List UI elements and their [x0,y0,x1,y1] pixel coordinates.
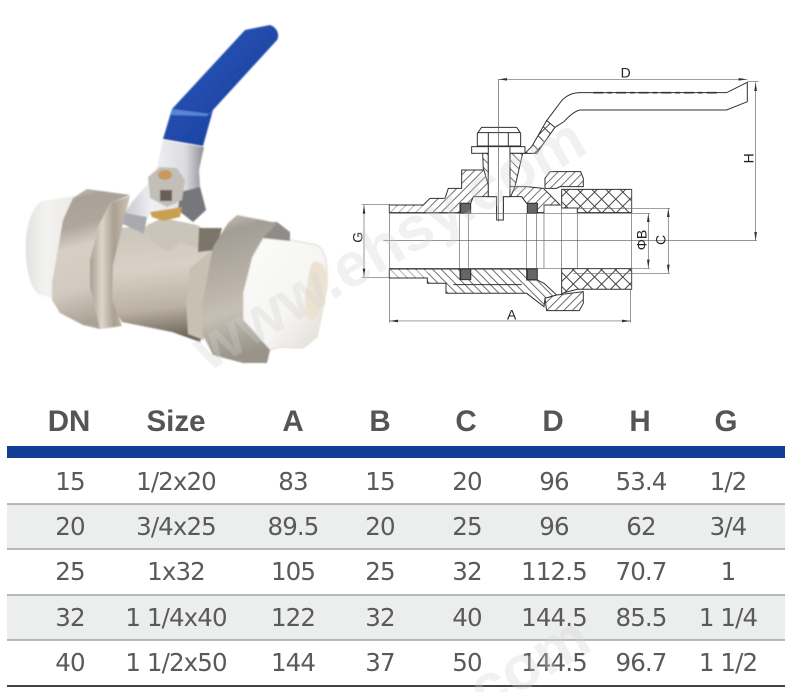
header row: B [369,405,391,438]
row DN20: 25 [452,512,482,541]
row DN40: 144 [271,648,315,677]
row DN40: 1 1/2 [699,648,757,677]
nut centre [158,170,172,180]
dimension labels: D [621,65,631,81]
row DN25: 1x32 [147,557,205,586]
right white pipe [243,238,327,350]
seal rings [461,203,537,280]
photo: ball valve with blue lever handle [26,25,327,363]
hex nut [477,127,521,146]
row DN15: 96 [539,467,569,496]
bottom body section [389,269,557,307]
valve body [108,226,215,342]
row DN25: 25 [55,557,85,586]
dimension labels: C [652,235,668,245]
row DN20: 62 [626,512,656,541]
stem nut [148,167,185,207]
technical cross-section drawing [350,65,758,323]
row DN40: 40 [55,648,85,677]
right union nut [202,215,277,363]
row DN15: 20 [452,467,482,496]
row DN32: 85.5 [616,603,666,632]
dimension labels: ΦB [634,230,650,250]
row dividers [7,504,785,640]
body neck [147,218,208,252]
row DN20: 89.5 [268,512,318,541]
right body ring [186,250,212,340]
row DN40: 144.5 [521,648,587,677]
row DN40: 50 [452,648,482,677]
row DN32 [55,603,757,632]
watermark: www.ehsy.com [180,104,597,385]
specification table [7,405,785,687]
row DN20: 3/4x25 [136,512,216,541]
row DN40: 1 1/2x50 [125,648,227,677]
right nut rear rim [255,222,290,245]
row DN25: 70.7 [616,557,666,586]
blue header bar [7,446,785,458]
dimension lines [362,79,758,323]
chrome dark lower side [178,187,206,222]
header row: G [715,405,737,438]
header row: D [542,405,564,438]
chrome foot shadow [123,213,147,234]
row DN20 [55,512,747,541]
row DN40: 37 [365,648,395,677]
bore lines [389,189,670,289]
lever profile [547,82,747,127]
row DN32: 40 [452,603,482,632]
chrome lever base [123,140,206,234]
alternate row backgrounds [7,504,785,640]
row DN15: 1/2 [710,467,746,496]
bottom body slot [453,283,522,286]
row DN15 [55,467,746,496]
dark gap by right nut [198,228,222,252]
row DN25: 1 [721,557,735,586]
bottom PPR cross-hatch [562,269,632,293]
row DN25: 112.5 [521,557,587,586]
lever neck [525,121,555,153]
row DN40 [55,648,757,677]
packing [483,153,523,187]
brass collar [150,207,182,221]
row DN20: 3/4 [710,512,747,541]
row DN32: 122 [271,603,315,632]
row DN15: 15 [365,467,395,496]
row DN20: 20 [55,512,85,541]
row DN25 [55,557,735,586]
header row: Size [146,405,206,438]
left union nut [52,189,130,329]
header row: DN [48,405,90,438]
header row [48,405,737,438]
header row: A [282,405,304,438]
bottom rule [7,685,785,687]
row DN32: 32 [55,603,85,632]
row DN40: 96.7 [616,648,666,677]
dimension labels: G [350,232,366,243]
right pipe bore [305,262,327,320]
bottom union nut [545,292,583,311]
row DN32: 1 1/4x40 [125,603,227,632]
washer [472,147,525,153]
row DN15: 15 [55,467,85,496]
header row: H [629,405,651,438]
top PPR cross-hatch [562,189,632,213]
dimension arrows [363,78,757,322]
stem [488,147,510,220]
top body section [389,170,560,213]
header row: C [455,405,477,438]
blue lever grip [163,25,278,146]
centre line [383,79,757,241]
row DN15: 1/2x20 [136,467,216,496]
row DN20: 96 [539,512,569,541]
row DN25: 105 [271,557,315,586]
thread fade [390,206,427,277]
row DN15: 53.4 [616,467,667,496]
row DN32: 144.5 [521,603,587,632]
dimension labels: A [507,306,517,322]
row DN20: 20 [365,512,395,541]
row DN25: 25 [365,557,395,586]
left white pipe [26,196,75,298]
row DN25: 32 [452,557,482,586]
dimension labels [350,65,756,322]
grip highlight [171,109,213,116]
row DN32: 1 1/4 [699,603,757,632]
row DN32: 32 [365,603,395,632]
nut shadow [160,190,172,201]
dimension labels: H [740,153,756,163]
top union nut [545,172,583,188]
row DN15: 83 [278,467,308,496]
lever centre line [593,90,717,95]
left flange [90,196,130,329]
